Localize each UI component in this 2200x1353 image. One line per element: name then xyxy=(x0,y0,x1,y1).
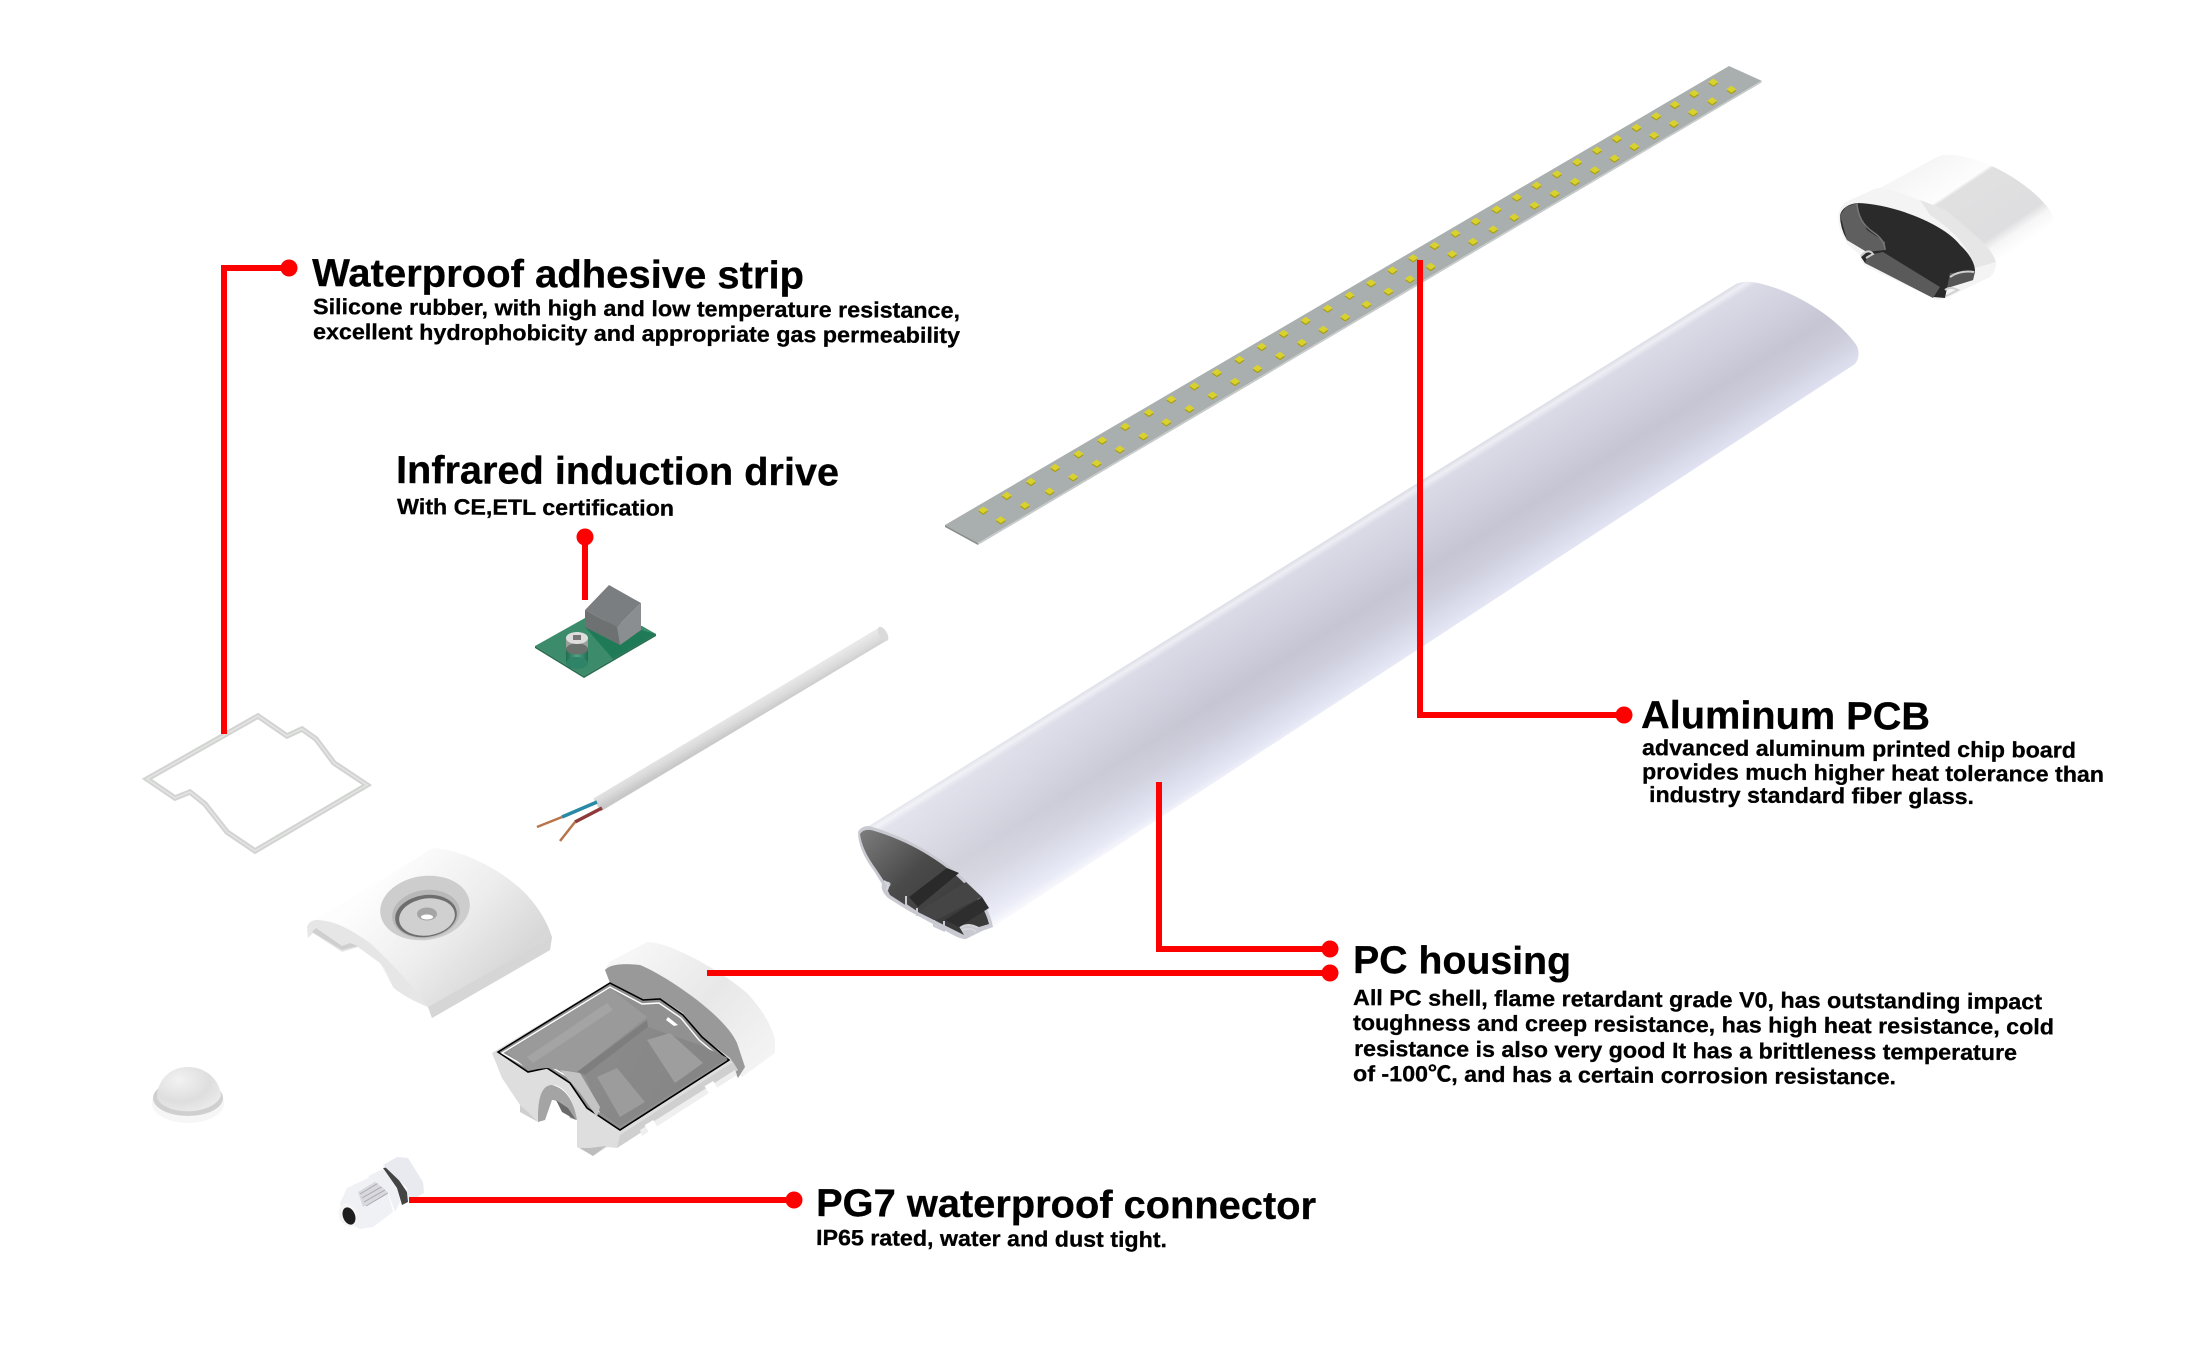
label: PC housing xyxy=(1353,939,2054,1089)
waterproof adhesive strip gasket xyxy=(147,716,367,851)
leader: PC housing tube xyxy=(1159,782,1338,958)
dome lens xyxy=(152,1067,224,1123)
label: PC housing: of -100℃, and has a certain corrosion resistance. xyxy=(1353,1061,1896,1089)
label: PC housing: All PC shell, flame retardant grade V0, has outstanding impact xyxy=(1353,985,2043,1014)
capacitor xyxy=(566,632,588,669)
end cap xyxy=(1838,155,2053,300)
end connector with open box xyxy=(492,942,775,1156)
sensor ring xyxy=(376,870,474,946)
relay box xyxy=(585,585,641,645)
label: waterproof adhesive strip xyxy=(312,252,961,348)
leader: PG7 connector xyxy=(409,1192,802,1208)
label: PG7 waterproof connector: IP65 rated, water and dust tight. xyxy=(816,1225,1167,1252)
label: infrared induction drive: With CE,ETL certification xyxy=(397,494,674,521)
label: infrared induction drive xyxy=(396,449,839,521)
leader: waterproof strip xyxy=(224,260,298,734)
label: aluminum PCB: Aluminum PCB xyxy=(1641,694,1930,739)
label: PG7 waterproof connector: PG7 waterproof connector xyxy=(816,1182,1316,1228)
label: aluminum PCB xyxy=(1641,694,2104,809)
cable with wires xyxy=(537,625,890,841)
label: aluminum PCB: advanced aluminum printed chip board xyxy=(1642,735,2076,763)
LED aluminum strip xyxy=(945,66,1762,545)
PG7 connector part xyxy=(335,1157,424,1229)
label: PC housing: resistance is also very good It has a brittleness temperature xyxy=(1354,1036,2017,1065)
tube opening with fins xyxy=(858,826,993,939)
leader: PC housing end xyxy=(707,964,1338,982)
PC housing tube xyxy=(858,282,1859,939)
label: PC housing: PC housing xyxy=(1353,939,1571,983)
label: PC housing: toughness and creep resistance, has high heat resistance, cold xyxy=(1353,1010,2054,1039)
leader: infrared drive xyxy=(576,528,594,600)
label: aluminum PCB: provides much higher heat tolerance than xyxy=(1642,759,2104,787)
leader: aluminum PCB xyxy=(1420,260,1632,724)
label: waterproof adhesive strip: Waterproof adhesive strip xyxy=(312,252,804,298)
label: aluminum PCB: industry standard fiber glass. xyxy=(1649,782,1974,809)
box interior xyxy=(498,983,729,1130)
label: infrared induction drive: Infrared induction drive xyxy=(396,449,839,494)
infrared induction drive board xyxy=(535,585,656,678)
label: waterproof adhesive strip: excellent hydrophobicity and appropriate gas permeability xyxy=(313,319,961,348)
sensor cover xyxy=(307,848,552,1018)
label: PG7 waterproof connector xyxy=(816,1182,1316,1252)
label: waterproof adhesive strip: Silicone rubber, with high and low temperature resistance, xyxy=(313,294,960,323)
